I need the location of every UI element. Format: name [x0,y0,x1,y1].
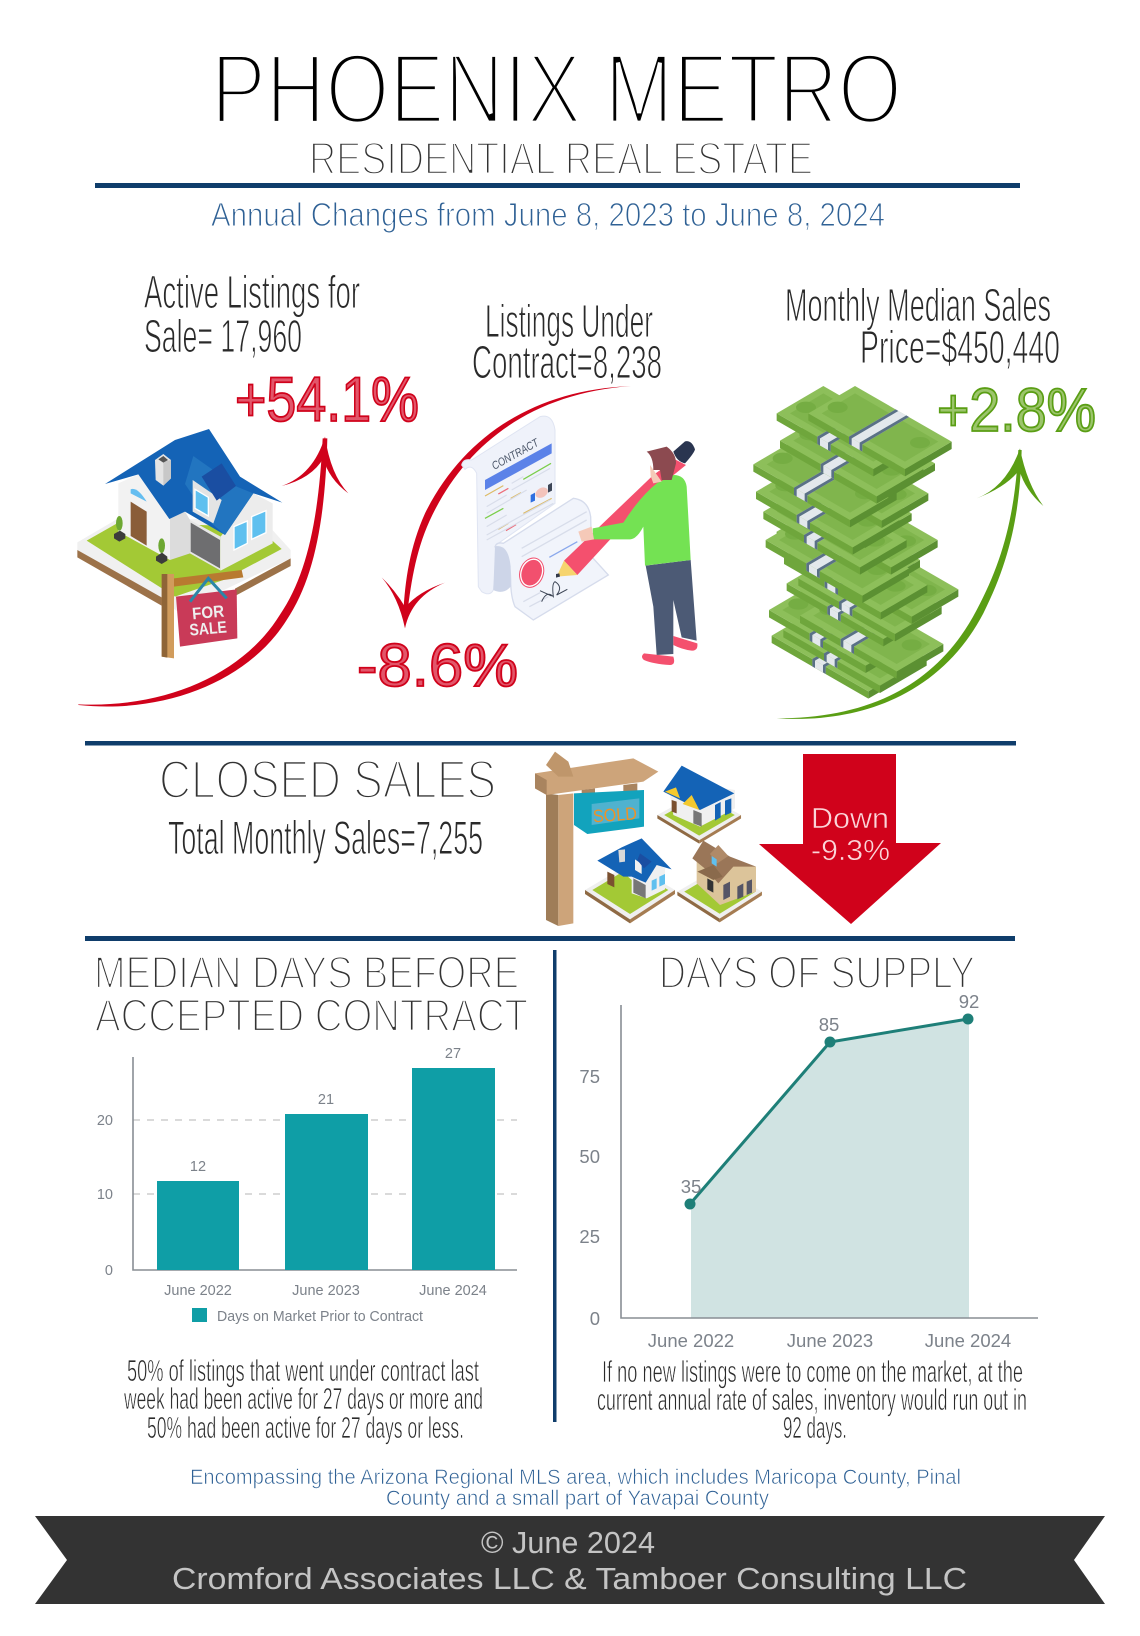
median days note: 50% of listings that went under contract last [127,1353,479,1388]
divider 1 [95,183,1020,188]
median price change: +2.8% [937,376,1096,444]
bar: June 2024 [412,1068,495,1270]
active listings label: Sale= 17,960 [144,310,302,362]
bar chart: June 2024 [419,1283,487,1299]
area chart: June 2023 [787,1330,873,1351]
bar chart: 10 [97,1187,113,1203]
bar chart: 27 [445,1046,461,1062]
icon: house for sale: FOR [191,602,225,623]
area chart [579,991,1038,1351]
days of supply note [597,1354,1027,1445]
total monthly sales: Total Monthly Sales=7,255 [168,811,483,864]
area chart: 75 [579,1066,600,1087]
divider 3 [85,936,1015,941]
area chart: 85 [819,1014,839,1035]
days of supply heading: DAYS OF SUPPLY [659,947,975,998]
area chart: June 2024 [925,1330,1011,1351]
bar chart: 20 [97,1113,113,1129]
title: PHOENIX METRO [211,33,902,144]
days of supply note: 92 days. [783,1410,847,1445]
panel: days of supply [579,947,1038,1445]
icon: house for sale: SALE [189,617,228,640]
vertical divider [553,950,556,1422]
area chart: June 2022 [648,1330,734,1351]
bar chart: 21 [318,1092,334,1108]
down percentage: -9.3% [811,835,890,867]
panel: active listings [77,266,419,707]
under contract label [472,295,662,388]
under contract label: Contract=8,238 [472,336,662,388]
bar chart [97,1046,517,1325]
median price label [785,279,1060,373]
icon: money stack [753,386,958,699]
arrow: down [382,386,631,628]
median days note [123,1353,483,1445]
active listings label [144,266,360,362]
bar chart: June 2022 [164,1283,232,1299]
area chart: 0 [590,1308,600,1329]
footnote: County and a small part of Yavapai County [386,1487,769,1510]
icon: person with giant pencil [556,441,697,665]
median days note: week had been active for 27 days or more and [123,1381,483,1416]
icon: contract document [462,416,608,620]
footnote: Encompassing the Arizona Regional MLS area, which includes Maricopa County, Pinal [190,1466,961,1489]
area chart: 92 [959,991,979,1012]
median days heading: ACCEPTED CONTRACT [95,990,528,1041]
panel: median sales price [753,279,1096,719]
area chart: 35 [681,1176,701,1197]
median days heading: MEDIAN DAYS BEFORE [94,947,519,998]
bar: June 2023 [285,1114,368,1270]
active listings change: +54.1% [235,365,419,435]
panel: median days [94,947,528,1445]
closed sales heading: CLOSED SALES [159,750,496,810]
footnote [190,1466,961,1510]
arrow: down sales [759,754,941,924]
icon: sold sign and houses [535,752,762,926]
date range heading: Annual Changes from June 8, 2023 to June 8, 2024 [211,196,885,233]
divider 2 [85,741,1016,746]
icon: sold sign and houses: SOLD [592,803,638,826]
panel: closed sales [159,750,941,926]
arrow: up [78,437,348,707]
median days note: 50% had been active for 27 days or less. [147,1410,464,1445]
median days heading [94,947,528,1041]
legend: Days on Market Prior to Contract [217,1309,423,1325]
copyright date: © June 2024 [481,1525,655,1560]
area chart: 25 [579,1226,600,1247]
bar chart: 12 [190,1159,206,1175]
area chart: 50 [579,1146,600,1167]
bar chart: 0 [105,1263,113,1279]
panel: listings under contract [357,295,697,699]
icon: house for sale [77,429,291,658]
arrow: up green [777,448,1043,719]
bar: June 2022 [157,1181,239,1270]
bar chart: June 2023 [292,1283,360,1299]
banner: credits [35,1516,1105,1604]
icon: contract document: CONTRACT [490,437,542,473]
active listings label: Active Listings for [144,266,360,318]
under contract label: Listings Under [485,295,653,347]
subtitle: RESIDENTIAL REAL ESTATE [309,133,813,184]
under contract change: -8.6% [357,632,518,699]
down label: Down [811,803,889,835]
company names: Cromford Associates LLC & Tamboer Consulting LLC [172,1561,967,1596]
